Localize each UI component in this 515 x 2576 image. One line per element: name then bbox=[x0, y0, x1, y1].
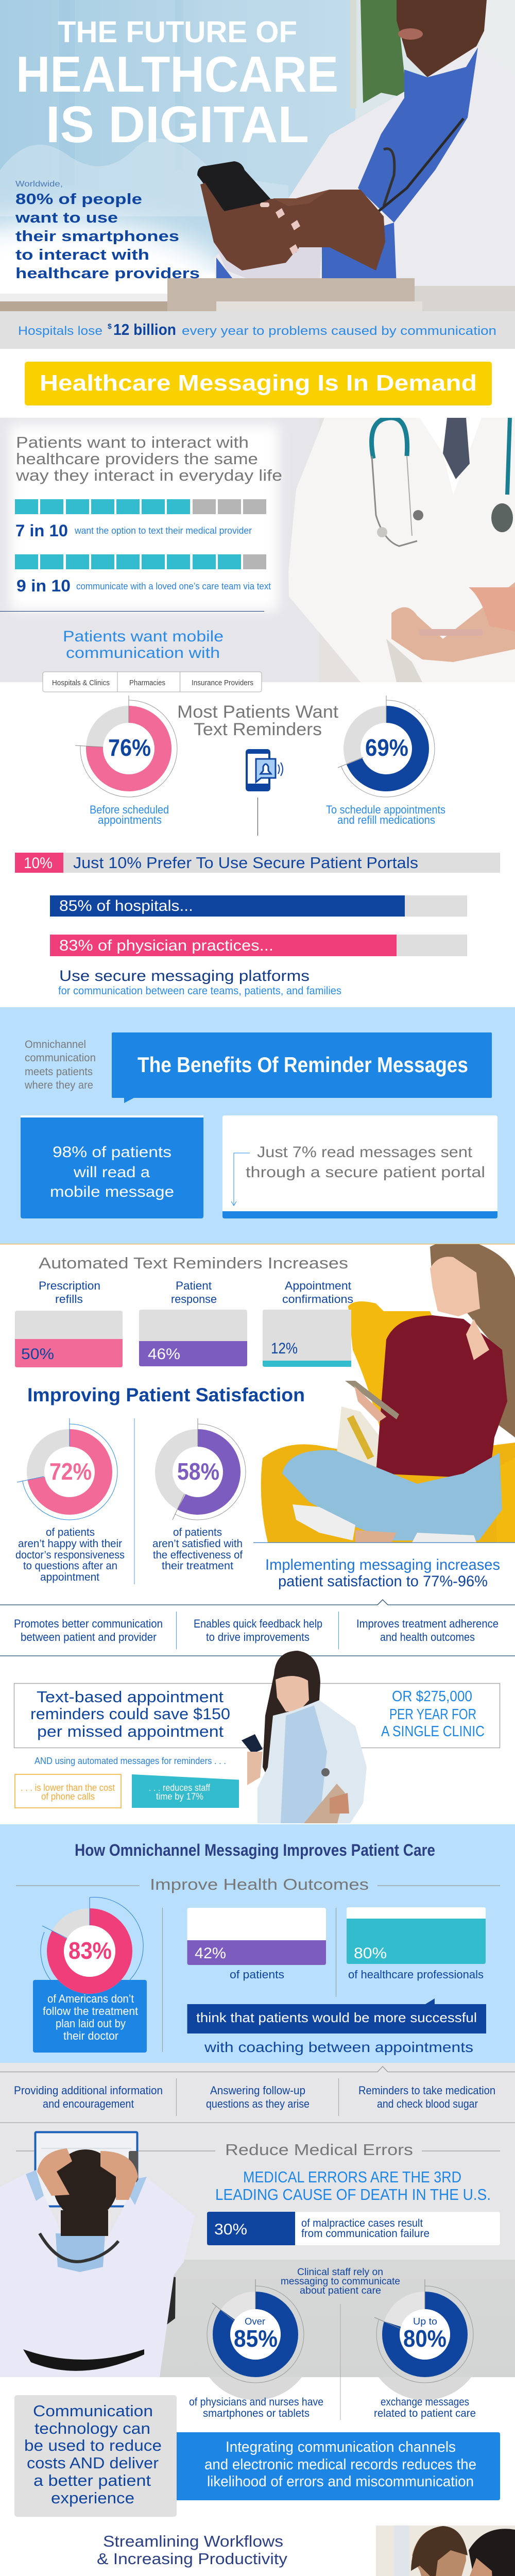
box: lower than cost of phone calls: . . . is lower than the cost bbox=[21, 1783, 115, 1793]
card: communication technology: technology can bbox=[35, 2419, 150, 2437]
text: secure messaging platforms: for communication between care teams, patients, and families bbox=[58, 985, 341, 997]
card: 98% of patients: mobile message bbox=[50, 1183, 174, 1200]
benefits row: patient satisfaction: Improves treatment adherence bbox=[356, 1617, 499, 1630]
card: integrating communication channels: and electronic medical records reduces the bbox=[204, 2456, 476, 2473]
callout box: text-based reminders: A SINGLE CLINIC bbox=[381, 1723, 485, 1740]
stat: 7 in 10 bbox=[15, 521, 252, 540]
text: omnichannel note: where they are bbox=[24, 1079, 93, 1091]
text: omnichannel note: meets patients bbox=[25, 1066, 93, 1078]
text: patients want mobile communication: communication with bbox=[66, 645, 220, 662]
heading: most patients want text reminders bbox=[177, 702, 339, 739]
photo: stressed doctor bbox=[0, 2132, 195, 2377]
panel: doctor photo bbox=[0, 418, 515, 682]
heading: automated text reminders: Automated Text Reminders Increases bbox=[39, 1254, 348, 1272]
card: americans don't follow: of Americans don’t bbox=[47, 1992, 134, 2005]
callout box: text-based reminders: reminders could save $150 bbox=[30, 1705, 230, 1723]
chart: 7 in 10 squares bbox=[15, 499, 266, 514]
text: medical errors third leading cause: LEADING CAUSE OF DEATH IN THE U.S. bbox=[215, 2185, 491, 2204]
text: exchange messages bbox=[374, 2396, 476, 2419]
benefits row: patient satisfaction: and health outcomes bbox=[380, 1631, 475, 1643]
chart: 46% patient response: 46% bbox=[148, 1346, 180, 1363]
bar: 30% malpractice: of malpractice cases result bbox=[301, 2217, 423, 2229]
benefits row: patient satisfaction: Promotes better communication bbox=[14, 1617, 163, 1630]
chart: 50% prescription refills: 50% bbox=[21, 1346, 54, 1363]
chart: 42% of patients: 42% bbox=[195, 1945, 226, 1962]
chart: 42% of patients: of patients bbox=[230, 1968, 284, 1981]
text: 58% caption: aren’t satisfied with bbox=[152, 1538, 243, 1550]
text: patients want to interact: Patients want to interact with bbox=[16, 433, 249, 451]
table: provider types: Hospitals & Clinics bbox=[52, 679, 110, 687]
label: before scheduled appointments bbox=[90, 803, 169, 826]
donut chart: 69% bbox=[338, 696, 435, 797]
label: to schedule appointments: and refill medications bbox=[337, 814, 435, 826]
text: implementing messaging: Implementing messaging increases bbox=[265, 1556, 500, 1573]
card: communication technology: Communication bbox=[33, 2402, 153, 2420]
callout box: text-based reminders: OR $275,000 bbox=[392, 1688, 472, 1705]
card: americans don't follow: their doctor bbox=[63, 2029, 118, 2042]
benefits row: patient satisfaction: to drive improvements bbox=[206, 1631, 310, 1643]
text: 72% caption: to questions after an bbox=[23, 1560, 117, 1572]
text: physicians and nurses bbox=[189, 2396, 323, 2419]
donut chart: over 85%: Over bbox=[245, 2316, 265, 2327]
table: provider types: Pharmacies bbox=[129, 679, 165, 687]
title: THE FUTURE OF bbox=[58, 15, 297, 49]
chart: 50% prescription refills bbox=[15, 1311, 123, 1367]
stat: 7 in 10: want the option to text their medical provider bbox=[74, 526, 252, 536]
heading banner: healthcare messaging bbox=[25, 362, 492, 405]
text: clinical staff rely: about patient care bbox=[300, 2285, 381, 2296]
card: integrating communication channels: Integrating communication channels bbox=[226, 2439, 456, 2455]
text: and using automated messages: AND using automated messages for reminders . . . bbox=[35, 1756, 226, 1766]
text: clinical staff rely: Clinical staff rely on bbox=[297, 2267, 383, 2278]
text: 58% caption bbox=[152, 1527, 243, 1572]
photo: nurses with clipboard bbox=[376, 2526, 515, 2576]
card: communication technology: experience bbox=[51, 2489, 134, 2507]
icon: phone with bell bbox=[247, 750, 283, 790]
heading: streamlining workflows bbox=[97, 2532, 288, 2568]
text: 72% caption: of patients bbox=[46, 1527, 95, 1538]
callout: hospitals lose 12 billion: $ bbox=[108, 322, 112, 330]
text: 72% caption: aren’t happy with their bbox=[18, 1538, 122, 1550]
bar: 30% malpractice: 30% bbox=[214, 2221, 247, 2238]
text: 72% caption bbox=[15, 1527, 125, 1583]
stat: 7 in 10: 7 in 10 bbox=[15, 521, 68, 540]
benefits row: health outcomes: and encouragement bbox=[43, 2097, 134, 2110]
bar: 10% prefer portals bbox=[15, 853, 500, 873]
chart: 9 in 10 squares bbox=[15, 554, 266, 569]
labels: reminder categories: confirmations bbox=[282, 1293, 353, 1306]
speech bubble: think that patients bbox=[187, 1998, 486, 2033]
text: medical errors third leading cause bbox=[215, 2168, 491, 2204]
labels: reminder categories: Patient bbox=[176, 1279, 212, 1292]
card: communication technology: be used to reduce bbox=[24, 2436, 162, 2454]
box: reduces staff time bbox=[132, 1774, 239, 1808]
benefits row: patient satisfaction: between patient and provider bbox=[21, 1631, 157, 1643]
text: omnichannel note bbox=[24, 1039, 96, 1091]
chart: 12% appointment confirmations bbox=[263, 1310, 351, 1367]
heading banner: healthcare messaging: Healthcare Messaging Is In Demand bbox=[40, 370, 477, 396]
chart: 42% of patients bbox=[187, 1908, 326, 1981]
speech bubble: think that patients: think that patients would be more successful bbox=[196, 2010, 477, 2025]
panel: omnichannel messaging bbox=[0, 1824, 515, 2063]
text: omnichannel note: communication bbox=[25, 1052, 96, 1064]
text: exchange messages: exchange messages bbox=[381, 2396, 469, 2408]
donut chart: over 85%: 85% bbox=[234, 2325, 278, 2352]
card: 98% of patients bbox=[21, 1115, 203, 1218]
intro text: their smartphones bbox=[15, 228, 179, 245]
text: patients want to interact bbox=[15, 433, 282, 484]
heading: streamlining workflows: & Increasing Productivity bbox=[97, 2550, 288, 2568]
callout: hospitals lose 12 billion bbox=[0, 311, 515, 349]
benefits row: health outcomes: and check blood sugar bbox=[377, 2097, 478, 2110]
callout: hospitals lose 12 billion: 12 billion bbox=[113, 320, 176, 338]
text: secure messaging platforms bbox=[58, 968, 341, 997]
bar: 85% of hospitals: 85% of hospitals... bbox=[59, 897, 193, 914]
heading: most patients want text reminders: Most Patients Want bbox=[177, 702, 339, 722]
intro text bbox=[15, 180, 200, 282]
text: exchange messages: related to patient care bbox=[374, 2408, 476, 2419]
card: just 7% read: Just 7% read messages sent bbox=[257, 1144, 473, 1161]
photo: woman on yellow chair bbox=[261, 1241, 515, 1543]
box: lower than cost of phone calls bbox=[15, 1774, 121, 1808]
bar: 83% of physician practices: 83% of physician practices... bbox=[59, 937, 273, 954]
chart: 80% of healthcare professionals: 80% bbox=[354, 1945, 387, 1962]
text: omnichannel note: Omnichannel bbox=[25, 1039, 86, 1050]
benefits row: patient satisfaction: Enables quick feedback help bbox=[194, 1617, 322, 1630]
benefits row: health outcomes: Reminders to take medication bbox=[358, 2084, 495, 2097]
callout box: text-based reminders: per missed appointment bbox=[37, 1722, 224, 1740]
heading: streamlining workflows: Streamlining Workflows bbox=[103, 2532, 283, 2550]
panel: gray backdrop bbox=[0, 2063, 515, 2377]
intro text: healthcare providers bbox=[15, 265, 200, 282]
card: integrating communication channels: likelihood of errors and miscommunication bbox=[207, 2473, 474, 2490]
photo: doctor with phone and clipboard bbox=[242, 1651, 367, 1823]
card: communication technology: costs AND deliver bbox=[27, 2454, 159, 2472]
text: secure messaging platforms: Use secure messaging platforms bbox=[59, 968, 310, 985]
label: to schedule appointments: To schedule appointments bbox=[326, 803, 445, 816]
chart: 80% of healthcare professionals bbox=[347, 1907, 486, 1981]
donut chart: up to 80% bbox=[374, 2279, 473, 2400]
benefits row: patient satisfaction bbox=[0, 1600, 515, 1656]
heading: improving patient satisfaction: Improving Patient Satisfaction bbox=[27, 1384, 305, 1405]
text: patients want mobile communication: Patients want mobile bbox=[63, 628, 224, 645]
speech bubble heading: The Benefits Of Reminder Messages bbox=[138, 1053, 468, 1077]
text: implementing messaging bbox=[265, 1556, 500, 1590]
stat: 9 in 10: 9 in 10 bbox=[16, 577, 71, 595]
title: HEALTHCARE bbox=[16, 46, 338, 103]
text: 58% caption: their treatment bbox=[162, 1560, 233, 1572]
text: clinical staff rely bbox=[281, 2267, 400, 2296]
text: medical errors third leading cause: MEDICAL ERRORS ARE THE 3RD bbox=[243, 2168, 461, 2186]
text: patients want to interact: way they interact in everyday life bbox=[15, 466, 282, 484]
label: before scheduled appointments: appointments bbox=[98, 814, 162, 826]
benefits row: health outcomes: Providing additional information bbox=[14, 2084, 163, 2097]
text: 58% caption: the effectiveness of bbox=[153, 1549, 243, 1561]
label: to schedule appointments bbox=[326, 803, 445, 826]
heading: How Omnichannel Messaging Improves Patient Care bbox=[75, 1841, 435, 1859]
card: just 7% read: through a secure patient portal bbox=[246, 1164, 485, 1181]
bar: 10% prefer portals: Just 10% Prefer To Use Secure Patient Portals bbox=[73, 854, 418, 872]
labels: reminder categories: refills bbox=[55, 1293, 83, 1306]
intro text: to interact with bbox=[15, 247, 149, 263]
speech bubble heading bbox=[112, 1032, 492, 1103]
labels: reminder categories: Prescription bbox=[39, 1279, 100, 1292]
bar: 10% prefer portals: 10% bbox=[24, 855, 53, 872]
bar: 30% malpractice: from communication failure bbox=[301, 2228, 430, 2240]
label: before scheduled appointments: Before scheduled bbox=[90, 803, 169, 816]
benefits row: health outcomes bbox=[0, 2066, 515, 2123]
callout: hospitals lose 12 billion: every year to problems caused by communication bbox=[182, 324, 496, 338]
donut chart: 58% bbox=[150, 1418, 246, 1520]
text: 58% caption: of patients bbox=[173, 1527, 222, 1538]
labels: reminder categories: response bbox=[171, 1293, 217, 1306]
donut chart: 83% bbox=[41, 1897, 143, 1986]
donut chart: 83%: 83% bbox=[68, 1937, 112, 1964]
text: with coaching: with coaching between appointments bbox=[204, 2039, 473, 2055]
chart: 46% patient response bbox=[139, 1310, 247, 1366]
text: 72% caption: appointment bbox=[40, 1571, 99, 1583]
card: communication technology bbox=[14, 2395, 177, 2517]
text: patients want to interact: healthcare providers the same bbox=[16, 450, 258, 468]
donut chart: 76% bbox=[75, 696, 177, 797]
card: 98% of patients: 98% of patients bbox=[53, 1144, 171, 1161]
title bbox=[16, 15, 338, 154]
donut chart: up to 80%: Up to bbox=[413, 2316, 437, 2327]
box: reduces staff time: . . . reduces staff bbox=[149, 1783, 211, 1793]
text: patients want mobile communication bbox=[63, 628, 224, 662]
intro text: Worldwide, bbox=[15, 180, 63, 189]
bar: 83% of physician practices bbox=[50, 935, 467, 956]
box: lower than cost of phone calls: of phone calls bbox=[41, 1791, 95, 1802]
donut chart: 58%: 58% bbox=[177, 1458, 219, 1485]
donut chart: 72%: 72% bbox=[49, 1458, 92, 1485]
labels: reminder categories bbox=[39, 1279, 353, 1306]
callout: hospitals lose 12 billion: Hospitals lose bbox=[18, 324, 102, 338]
table: provider types bbox=[43, 672, 262, 692]
donut chart: 76%: 76% bbox=[108, 734, 151, 761]
callout box: text-based reminders bbox=[14, 1684, 500, 1748]
stat: 9 in 10: communicate with a loved one’s care team via text bbox=[76, 581, 271, 591]
panel: benefits of reminder messages bbox=[0, 1007, 515, 1245]
card: communication technology: a better patient bbox=[33, 2471, 151, 2489]
donut chart: up to 80%: 80% bbox=[403, 2325, 447, 2352]
intro text: want to use bbox=[15, 210, 118, 226]
benefits row: health outcomes: Answering follow-up bbox=[210, 2084, 305, 2097]
text: physicians and nurses: of physicians and nurses have bbox=[189, 2396, 323, 2408]
table: provider types: Insurance Providers bbox=[192, 679, 253, 687]
card: 98% of patients: will read a bbox=[73, 1164, 150, 1181]
card: just 7% read bbox=[222, 1115, 497, 1218]
text: clinical staff rely: messaging to communicate bbox=[281, 2276, 400, 2287]
text: implementing messaging: patient satisfaction to 77%-96% bbox=[278, 1573, 488, 1590]
subheading: reduce medical errors: Reduce Medical Errors bbox=[225, 2141, 413, 2159]
stat: 9 in 10 bbox=[16, 577, 271, 595]
benefits row: health outcomes: questions as they arise bbox=[206, 2097, 310, 2110]
title: IS DIGITAL bbox=[46, 96, 309, 154]
callout box: text-based reminders: PER YEAR FOR bbox=[389, 1706, 476, 1723]
heading: most patients want text reminders: Text Reminders bbox=[194, 720, 322, 739]
card: americans don't follow: plan laid out by bbox=[56, 2017, 126, 2030]
donut chart: over 85% bbox=[207, 2279, 304, 2400]
bar: 30% malpractice bbox=[207, 2212, 500, 2245]
bar: 85% of hospitals bbox=[50, 895, 467, 917]
subheading: improve health outcomes: Improve Health Outcomes bbox=[150, 1875, 369, 1893]
chart: 12% appointment confirmations: 12% bbox=[271, 1340, 298, 1357]
donut chart: 69%: 69% bbox=[365, 734, 408, 761]
box: reduces staff time: time by 17% bbox=[156, 1791, 203, 1802]
card: americans don't follow bbox=[33, 1980, 147, 2053]
chart: 80% of healthcare professionals: of healthcare professionals bbox=[348, 1968, 484, 1981]
text: 72% caption: doctor’s responsiveness bbox=[15, 1549, 125, 1561]
intro text: 80% of people bbox=[15, 191, 142, 208]
card: americans don't follow: follow the treatment bbox=[43, 2005, 138, 2018]
callout box: text-based reminders: Text-based appointment bbox=[37, 1688, 224, 1706]
card: integrating communication channels bbox=[177, 2432, 500, 2500]
hero panel bbox=[0, 0, 515, 311]
labels: reminder categories: Appointment bbox=[285, 1279, 351, 1292]
text: physicians and nurses: smartphones or tablets bbox=[203, 2408, 310, 2419]
donut chart: 72% bbox=[17, 1418, 117, 1520]
